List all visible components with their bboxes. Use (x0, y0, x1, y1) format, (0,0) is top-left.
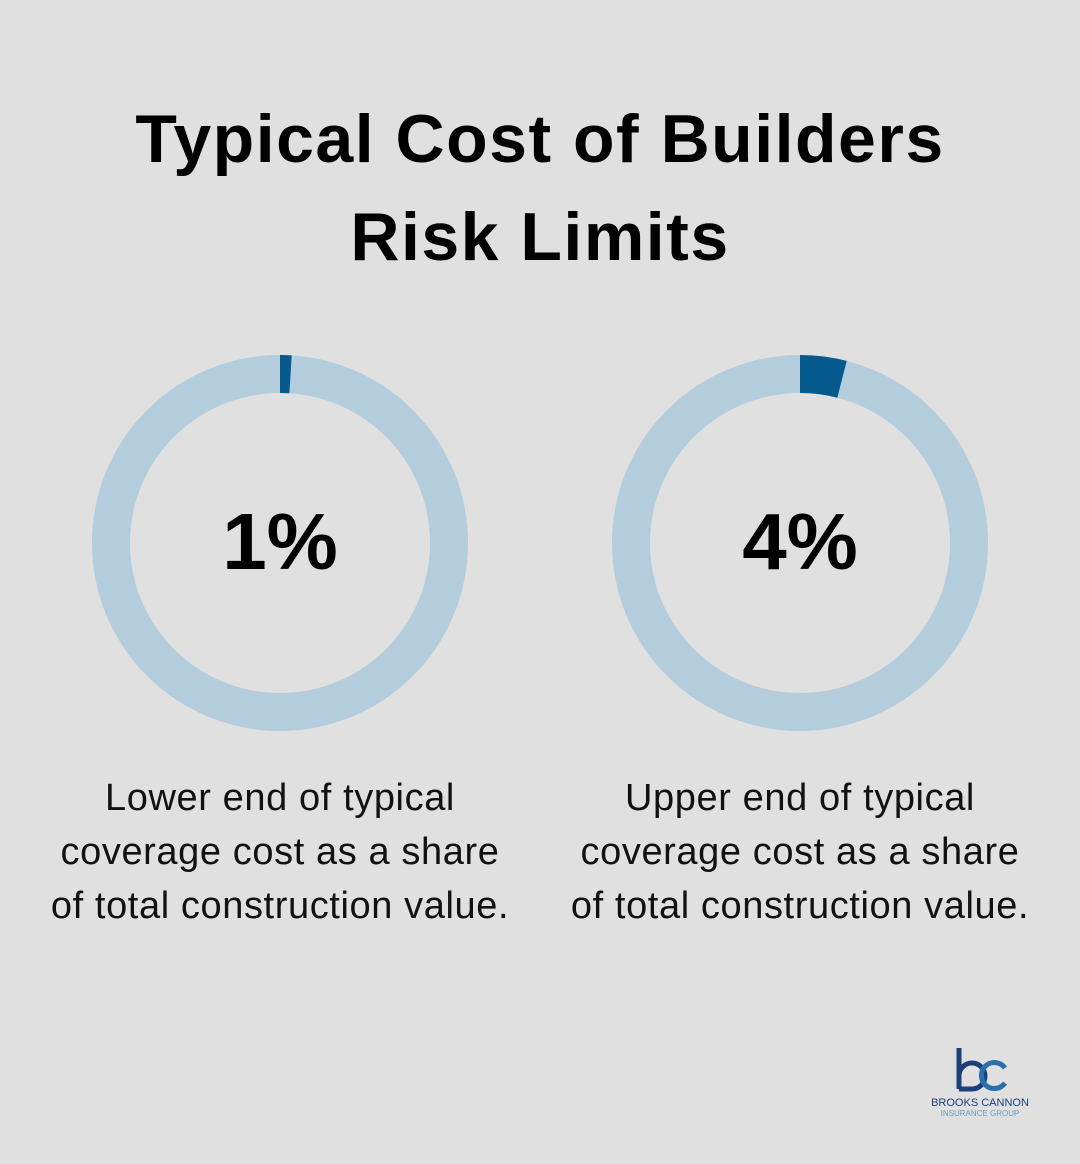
title (135, 101, 945, 275)
text: lower end description: coverage cost as a share (61, 831, 499, 873)
text: lower end description: of total construction value. (51, 885, 509, 927)
chart: donut 4%: 4% (742, 497, 858, 586)
logo: Brooks Cannon: INSURANCE GROUP (941, 1109, 1019, 1118)
title: Risk Limits (350, 199, 730, 275)
text: lower end description: Lower end of typical (105, 777, 455, 819)
chart: donut 1% (92, 355, 468, 731)
text: upper end description: Upper end of typical (625, 777, 975, 819)
text: upper end description: of total construction value. (571, 885, 1029, 927)
chart: donut 4% (612, 355, 988, 731)
text: lower end description (51, 777, 509, 927)
title: Typical Cost of Builders (135, 101, 945, 177)
text: upper end description (571, 777, 1029, 927)
chart: donut 1%: 1% (222, 497, 338, 586)
logo: Brooks Cannon: BROOKS CANNON (931, 1097, 1029, 1109)
logo: Brooks Cannon (931, 1048, 1029, 1118)
text: upper end description: coverage cost as a share (581, 831, 1019, 873)
